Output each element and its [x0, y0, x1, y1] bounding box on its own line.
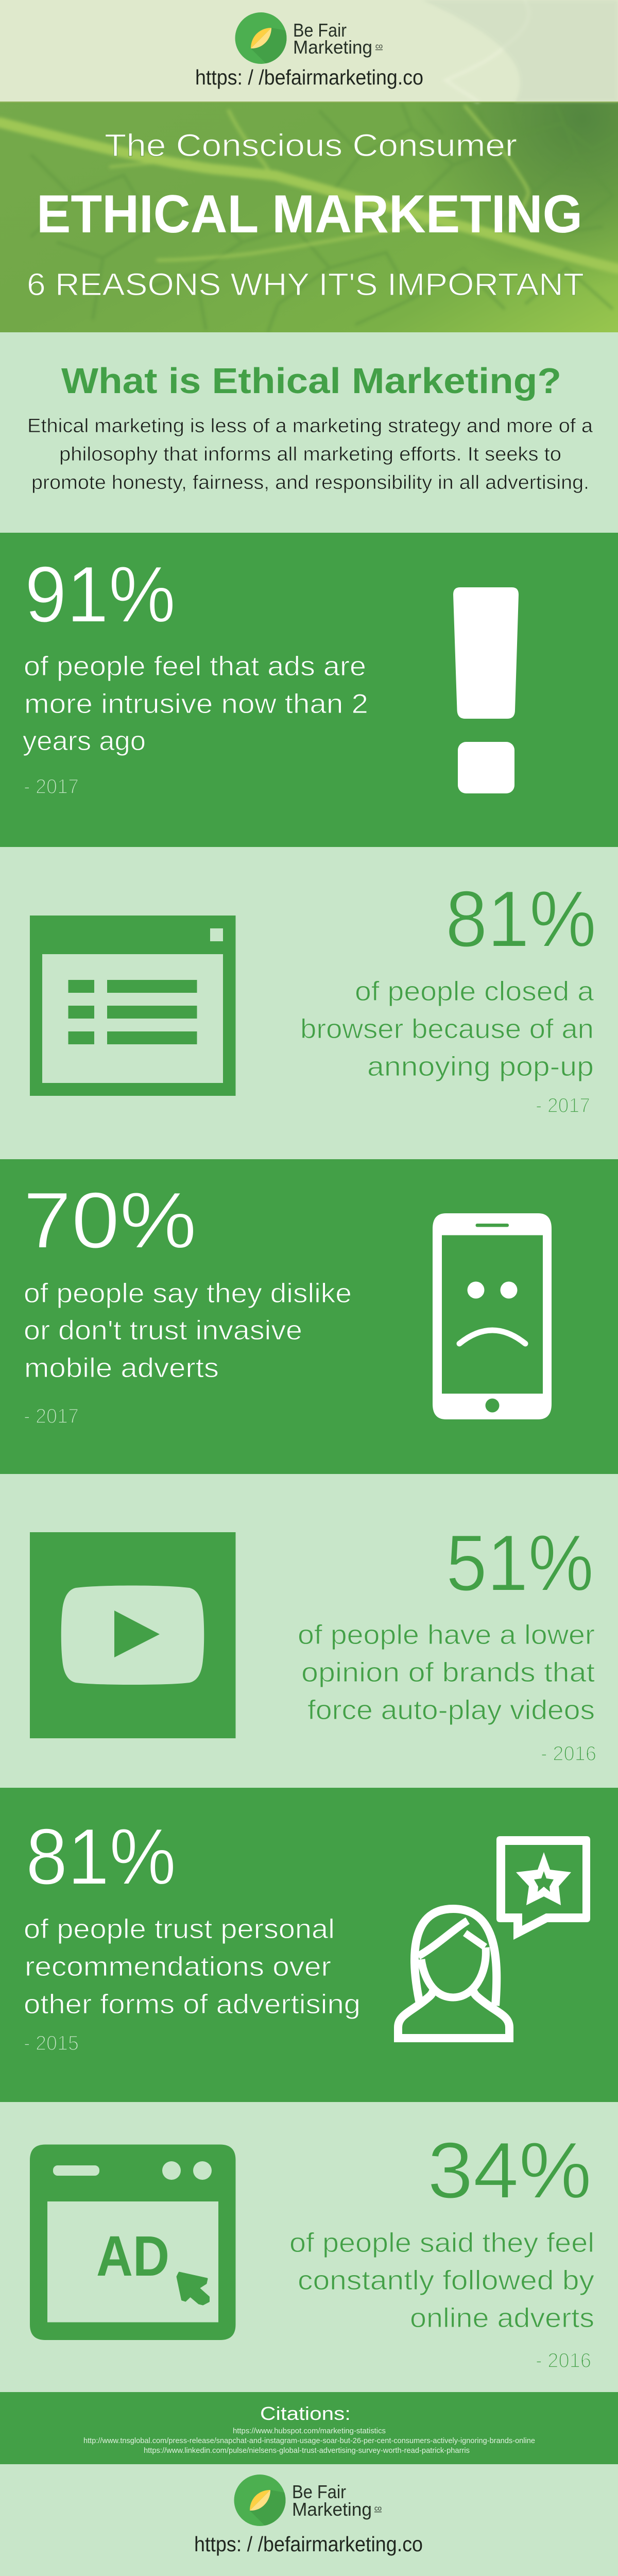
- logo: Be Fair Marketing top: [235, 12, 383, 64]
- stat description: annoying pop-up: [367, 1052, 594, 1082]
- panel: page header with leaf photo background: [0, 0, 618, 332]
- panel: footer: [196, 2475, 422, 2555]
- stat description: [23, 651, 368, 756]
- stat number: 51%: [446, 1518, 594, 1607]
- hero title: ETHICAL MARKETING: [37, 184, 582, 244]
- icon: video play button: [30, 1532, 236, 1738]
- stat description: other forms of advertising: [24, 1989, 360, 2020]
- logo: Be Fair Marketing bottom: Be Fair: [292, 2481, 346, 2502]
- logo: Be Fair Marketing top: co: [375, 42, 383, 50]
- stat number: 34%: [427, 2126, 592, 2215]
- stat year: - 2015: [24, 2032, 79, 2055]
- stat description: [298, 1620, 595, 1725]
- stat description: opinion of brands that: [301, 1657, 595, 1688]
- icon: browser window with list: [30, 916, 236, 1096]
- citation links: https://www.linkedin.com/pulse/nielsens-global-trust-advertising-survey-worth-read-patrick-pharris: [144, 2447, 470, 2455]
- stat number: 81%: [26, 1812, 176, 1901]
- stat year: - 2017: [536, 1094, 590, 1117]
- hero kicker: The Conscious Consumer: [105, 128, 517, 163]
- panel: citations: [0, 2392, 618, 2464]
- definition text: promote honesty, fairness, and responsibility in all advertising.: [31, 472, 589, 494]
- website url top: https: / /befairmarketing.co: [195, 65, 423, 89]
- panel: hero title: [0, 102, 618, 332]
- stat year: - 2016: [541, 1742, 596, 1765]
- stat description: [24, 1278, 352, 1383]
- panel: stat 70%: [0, 1159, 618, 1474]
- panel: stat 81% recommendations: [0, 1788, 618, 2102]
- citation links: [83, 2427, 535, 2455]
- stat year: - 2016: [536, 2349, 591, 2372]
- icon: ad browser window with cursor: [30, 2144, 236, 2340]
- panel: what is ethical marketing: [0, 332, 618, 533]
- panel: stat 51%: [0, 1474, 618, 1788]
- panel: stat 34%: [0, 2102, 618, 2392]
- stat year: - 2017: [24, 775, 79, 798]
- stat description: constantly followed by: [298, 2265, 595, 2296]
- icon: woman portrait: [398, 1909, 509, 2038]
- stat description: [300, 976, 594, 1082]
- stat description: mobile adverts: [24, 1353, 219, 1383]
- logo: Be Fair Marketing top: Marketing: [293, 37, 372, 58]
- definition text: Ethical marketing is less of a marketing strategy and more of a: [27, 415, 593, 437]
- stat description: of people closed a: [355, 976, 594, 1007]
- logo: Be Fair Marketing bottom: Marketing: [292, 2499, 372, 2520]
- stat number: 91%: [25, 550, 176, 639]
- stat description: of people trust personal: [24, 1914, 335, 1944]
- stat description: of people said they feel: [289, 2228, 594, 2258]
- citations heading: Citations:: [260, 2403, 351, 2424]
- website url bottom: https: / /befairmarketing.co: [194, 2532, 423, 2556]
- stat description: of people have a lower: [298, 1620, 595, 1650]
- heading: What is Ethical Marketing?: [61, 361, 561, 401]
- stat description: or don't trust invasive: [24, 1315, 302, 1346]
- icon: speech bubble with star: [496, 1836, 590, 1940]
- stat description: of people feel that ads are: [24, 651, 366, 682]
- definition text: philosophy that informs all marketing efforts. It seeks to: [59, 444, 561, 465]
- stat year: - 2017: [24, 1405, 79, 1428]
- stat description: more intrusive now than 2: [24, 689, 368, 719]
- hero subtitle: 6 REASONS WHY IT'S IMPORTANT: [27, 267, 584, 302]
- stat description: browser because of an: [300, 1014, 594, 1044]
- stat number: 81%: [445, 874, 596, 963]
- panel: stat 91%: [0, 533, 618, 847]
- stat description: online adverts: [410, 2303, 594, 2333]
- stat description: of people say they dislike: [24, 1278, 352, 1309]
- icon: sad smartphone: [433, 1213, 552, 1419]
- logo: Be Fair Marketing top: Be Fair: [293, 20, 347, 41]
- citation links: https://www.hubspot.com/marketing-statistics: [233, 2427, 386, 2435]
- icon: exclamation mark: [453, 587, 519, 793]
- stat description: [24, 1914, 360, 2020]
- stat description: force auto-play videos: [307, 1695, 595, 1725]
- stat description: [289, 2228, 595, 2333]
- panel: stat 81% pop-up: [0, 847, 618, 1159]
- stat number: 70%: [23, 1176, 197, 1265]
- logo: Be Fair Marketing bottom: co: [374, 2504, 382, 2512]
- logo: Be Fair Marketing bottom: [234, 2475, 382, 2526]
- stat description: recommendations over: [25, 1952, 331, 1982]
- icon: ad browser window with cursor: AD: [96, 2225, 169, 2288]
- stat description: years ago: [23, 726, 146, 756]
- definition text: [27, 415, 593, 494]
- citation links: http://www.tnsglobal.com/press-release/snapchat-and-instagram-usage-soar-but-26-per-cent-consumers-actively-ignoring-brands-online: [83, 2437, 535, 2445]
